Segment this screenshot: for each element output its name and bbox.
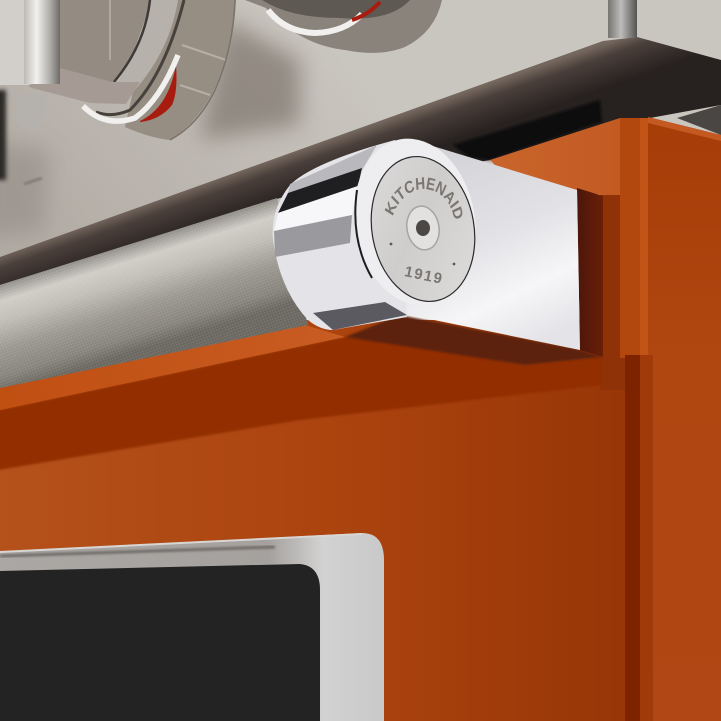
end cap with logo [354, 138, 476, 302]
engraved brand text: KITCHENAID [384, 177, 462, 219]
knob cap [58, 0, 152, 85]
white reflection band [274, 186, 358, 231]
oven window frame [0, 533, 384, 721]
oven window glass [0, 564, 320, 721]
shadow-side grey wall at right [677, 105, 721, 135]
chrome mounting block [400, 140, 580, 350]
knurled handle bar [0, 198, 308, 388]
black reflection band [278, 168, 362, 213]
lower dark reflection [313, 302, 407, 330]
inner disc [360, 148, 486, 310]
white chrome ring [83, 55, 178, 121]
background: stainless steel control panel [0, 0, 721, 300]
knob foot [14, 92, 46, 130]
control knob left [14, 0, 236, 140]
recess beside block [600, 195, 625, 390]
chrome post at top right [608, 0, 637, 38]
dark ring edge [355, 190, 372, 278]
center hex screw [403, 204, 443, 252]
red accent right [352, 2, 380, 20]
dark vent slot [453, 100, 602, 160]
top reflection strip [288, 145, 377, 193]
grey reflection band [274, 215, 352, 257]
block side shadow [577, 188, 603, 357]
white chrome ring right [268, 10, 362, 33]
right stile [648, 117, 721, 721]
engraved dots [390, 243, 455, 265]
knob lever [28, 68, 140, 104]
knob skirt [125, 0, 236, 140]
door recessed shadow band [0, 337, 602, 473]
engraved year: 1919 [403, 263, 445, 288]
control knob right [245, 0, 442, 53]
light lip under bar [0, 325, 345, 410]
upper panel behind block [490, 118, 625, 200]
chrome collar [273, 140, 407, 330]
knob stem [24, 0, 60, 84]
dark inner rim [96, 0, 184, 115]
cap chrome ring [116, 0, 178, 90]
polished outer ring [341, 129, 489, 315]
shadow under mounting block [345, 315, 602, 365]
red accent [140, 65, 176, 122]
dark underside of control panel [0, 37, 721, 285]
